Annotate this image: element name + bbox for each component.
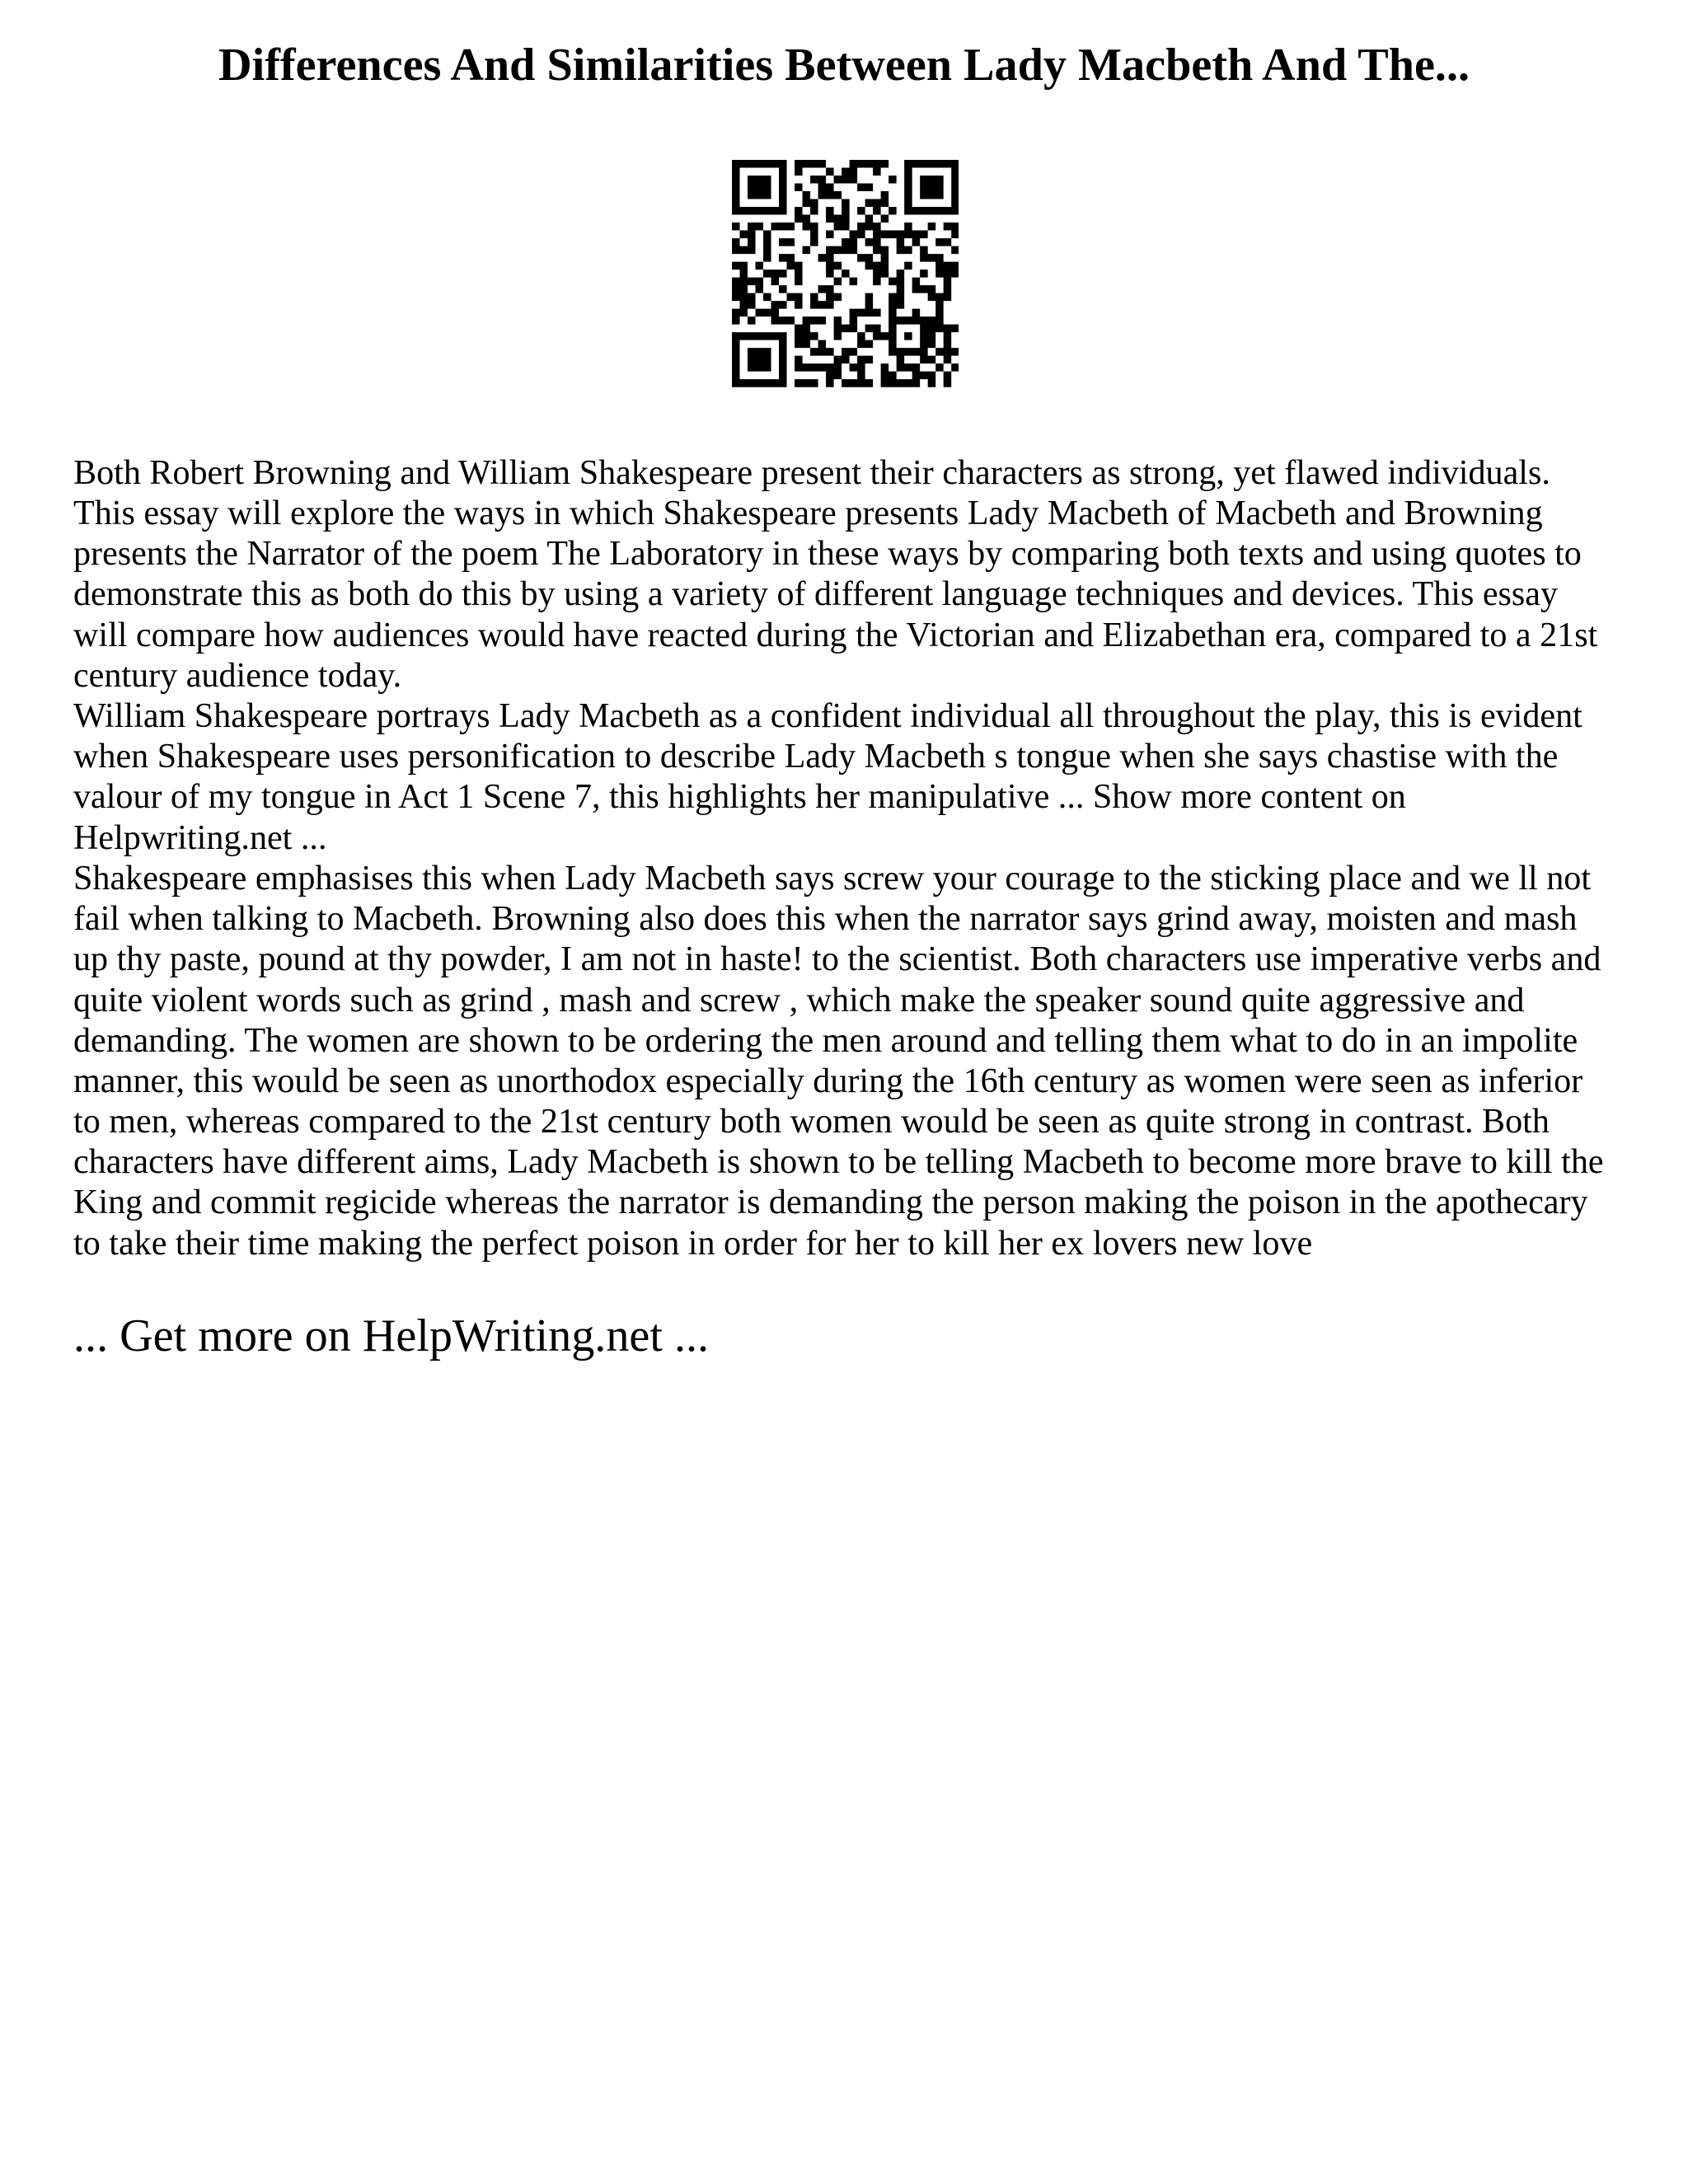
icon: QR code	[732, 160, 959, 387]
paragraph: Lady Macbeth confidence: when Shakespeare uses personification to describe Lady Macbeth s tongue when she says chastise with the	[73, 737, 1558, 776]
paragraph: Lady Macbeth confidence	[73, 696, 1582, 857]
paragraph: comparison of characters: Shakespeare emphasises this when Lady Macbeth says screw your courage to the sticking place and we ll not	[73, 859, 1591, 898]
paragraph: introduction: Both Robert Browning and William Shakespeare present their characters as strong, yet flawed individuals.	[73, 453, 1550, 492]
paragraph: introduction: presents the Narrator of the poem The Laboratory in these ways by comparing both texts and using quotes to	[73, 534, 1582, 573]
call to action line: ... Get more on HelpWriting.net ...	[73, 1310, 709, 1361]
paragraph: comparison of characters: up thy paste, pound at thy powder, I am not in haste! to the scientist. Both characters use imperative verbs and	[73, 940, 1601, 978]
paragraph: comparison of characters: characters have different aims, Lady Macbeth is shown to be telling Macbeth to become more brave to kill the	[73, 1142, 1604, 1181]
paragraph: introduction: century audience today.	[73, 656, 401, 695]
essay text block	[73, 453, 1604, 1263]
paragraph: comparison of characters: to take their time making the perfect poison in order for her to kill her ex lovers new love	[73, 1224, 1312, 1263]
paragraph: introduction: will compare how audiences would have reacted during the Victorian and Elizabethan era, compared to a 21st	[73, 616, 1597, 654]
title: Differences And Similarities Between Lady Macbeth And The...	[218, 40, 1470, 91]
paragraph: introduction: This essay will explore the ways in which Shakespeare presents Lady Macbeth of Macbeth and Browning	[73, 494, 1543, 532]
paragraph: comparison of characters: quite violent words such as grind , mash and screw , which make the speaker sound quite aggressive and	[73, 981, 1524, 1019]
paragraph: Lady Macbeth confidence: Helpwriting.net ...	[73, 818, 326, 857]
paragraph: Lady Macbeth confidence: William Shakespeare portrays Lady Macbeth as a confident individual all throughout the play, this is evident	[73, 696, 1582, 735]
paragraph: comparison of characters: to men, whereas compared to the 21st century both women would be seen as quite strong in contrast. Both	[73, 1102, 1550, 1141]
paragraph: comparison of characters: fail when talking to Macbeth. Browning also does this when the narrator says grind away, moisten and mash	[73, 899, 1577, 938]
paragraph: comparison of characters: demanding. The women are shown to be ordering the men around and telling them what to do in an impolite	[73, 1021, 1578, 1060]
paragraph: comparison of characters	[73, 859, 1604, 1263]
paragraph: Lady Macbeth confidence: valour of my tongue in Act 1 Scene 7, this highlights her manipulative ... Show more content on	[73, 777, 1406, 816]
paragraph: introduction: demonstrate this as both do this by using a variety of different language techniques and devices. This essay	[73, 574, 1558, 613]
paragraph: introduction	[73, 453, 1597, 695]
paragraph: comparison of characters: King and commit regicide whereas the narrator is demanding the person making the poison in the apothecary	[73, 1183, 1588, 1221]
paragraph: comparison of characters: manner, this would be seen as unorthodox especially during the 16th century as women were seen as inferior	[73, 1062, 1582, 1100]
